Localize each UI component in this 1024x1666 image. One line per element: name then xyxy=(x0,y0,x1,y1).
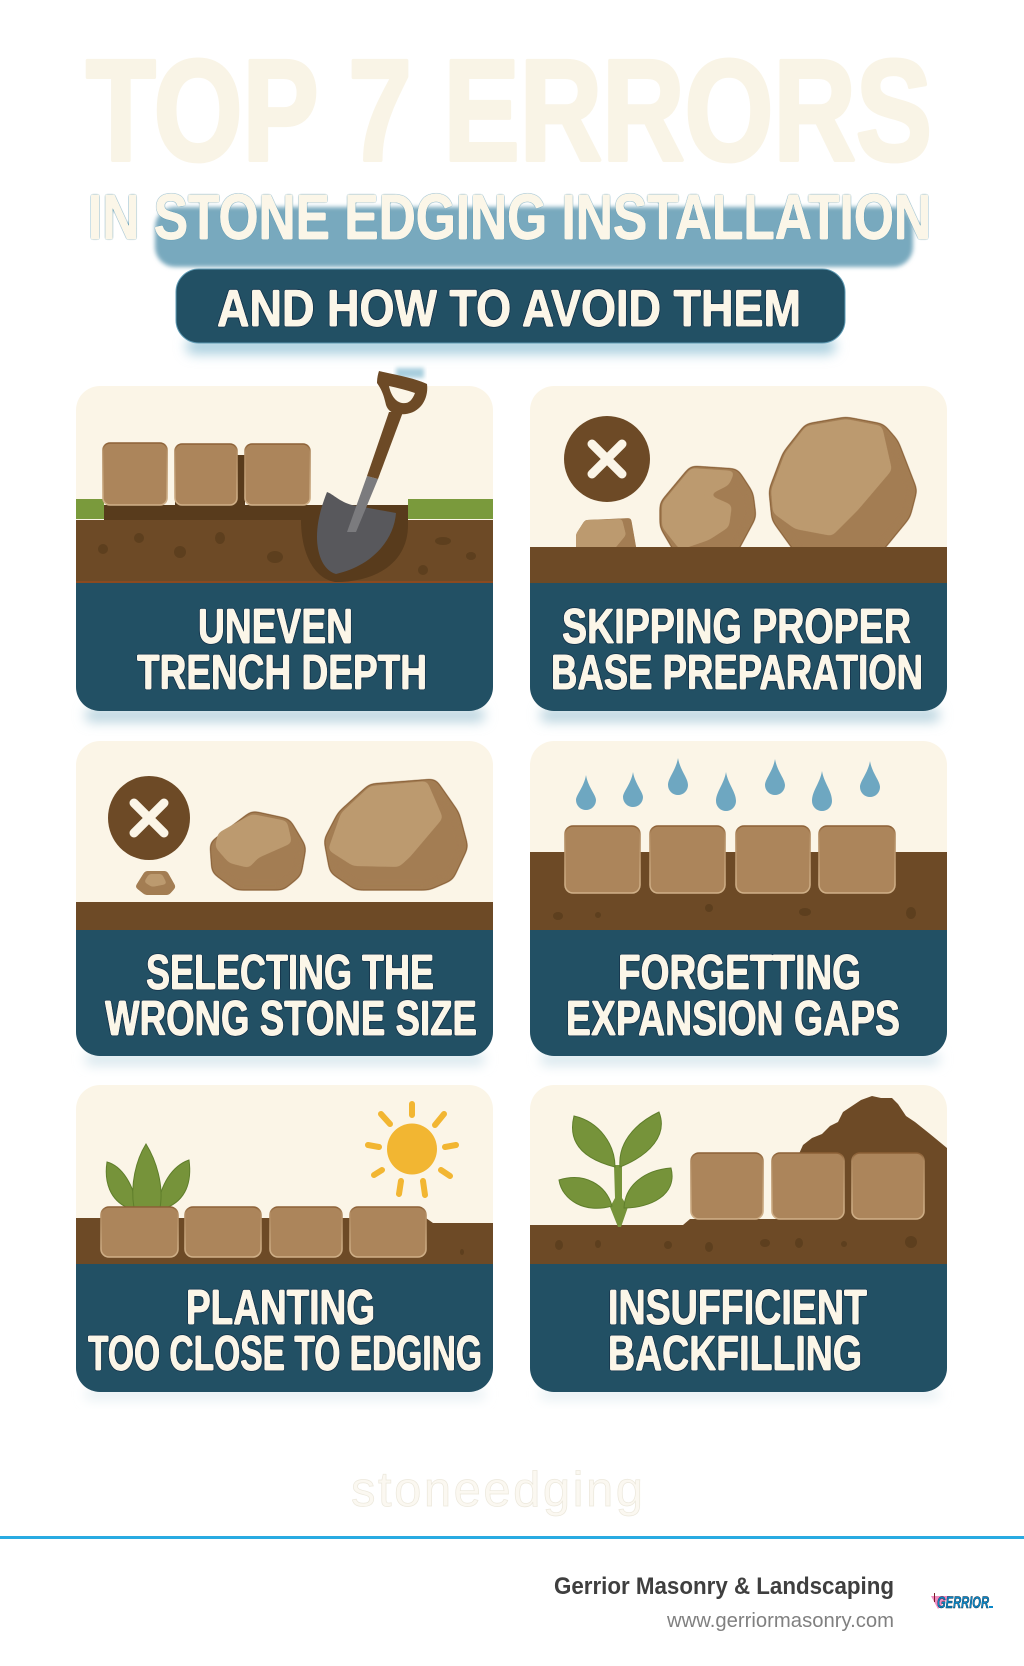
small stone xyxy=(576,518,636,547)
edging stones xyxy=(565,826,895,893)
edging stones xyxy=(691,1153,924,1219)
soil and backfill mound xyxy=(530,1096,947,1264)
footer company name: Gerrior Masonry & Landscaping xyxy=(554,1573,894,1600)
soil bar xyxy=(76,902,493,930)
plant xyxy=(106,1144,190,1208)
label: planting too close to edging: TOO CLOSE TO EDGING xyxy=(88,1327,482,1381)
label: insufficient backfilling xyxy=(609,1288,868,1372)
pill heading: AND HOW TO AVOID THEM xyxy=(217,280,801,338)
panel: selecting the wrong stone size xyxy=(76,741,493,1065)
label: selecting the wrong stone size: WRONG STONE SIZE xyxy=(105,992,477,1046)
small stone xyxy=(135,871,176,895)
label: insufficient backfilling: BACKFILLING xyxy=(608,1327,862,1381)
soil bar xyxy=(530,547,947,583)
medium stone xyxy=(661,467,755,556)
edging stones xyxy=(101,1207,426,1257)
grass strips xyxy=(76,499,493,519)
medium stone xyxy=(211,812,305,889)
icon: no symbol xyxy=(108,776,190,860)
large stone xyxy=(770,418,916,556)
label: planting too close to edging xyxy=(87,1288,482,1372)
icon: sun xyxy=(368,1104,456,1195)
icon: shovel xyxy=(317,368,427,574)
label: skipping proper base preparation: SKIPPING PROPER xyxy=(562,600,911,654)
label: uneven trench depth: UNEVEN xyxy=(198,600,353,654)
label: insufficient backfilling: INSUFFICIENT xyxy=(608,1281,867,1335)
plant xyxy=(559,1112,672,1227)
footer divider xyxy=(0,1536,1024,1539)
footer logo xyxy=(931,1593,993,1612)
footer website: www.gerriormasonry.com xyxy=(666,1610,894,1632)
footer logo: GERRIOR xyxy=(937,1593,989,1612)
water drops xyxy=(576,758,880,811)
label: selecting the wrong stone size xyxy=(104,953,477,1037)
panel: skipping proper base preparation xyxy=(530,386,947,722)
soil xyxy=(530,852,947,930)
panel: uneven trench depth xyxy=(76,368,493,722)
label: uneven trench depth: TRENCH DEPTH xyxy=(137,646,427,700)
icon: no symbol xyxy=(564,416,650,502)
large stone xyxy=(325,780,467,889)
panel: planting too close to edging xyxy=(76,1085,493,1399)
label: forgetting expansion gaps: EXPANSION GAPS xyxy=(566,992,900,1046)
soil cross-section xyxy=(76,455,493,583)
pill heading xyxy=(176,269,845,354)
label: selecting the wrong stone size: SELECTING THE xyxy=(146,946,434,1000)
label: planting too close to edging: PLANTING xyxy=(186,1281,375,1335)
label: uneven trench depth xyxy=(136,608,426,691)
panel: forgetting expansion gaps xyxy=(530,741,947,1065)
label: skipping proper base preparation xyxy=(552,607,922,691)
faint watermark word: stoneedging xyxy=(351,1463,643,1517)
edging stones xyxy=(103,443,310,505)
panel: insufficient backfilling xyxy=(530,1085,947,1399)
label: forgetting expansion gaps xyxy=(567,953,900,1037)
label: forgetting expansion gaps: FORGETTING xyxy=(618,946,861,1000)
soil xyxy=(76,1218,493,1264)
